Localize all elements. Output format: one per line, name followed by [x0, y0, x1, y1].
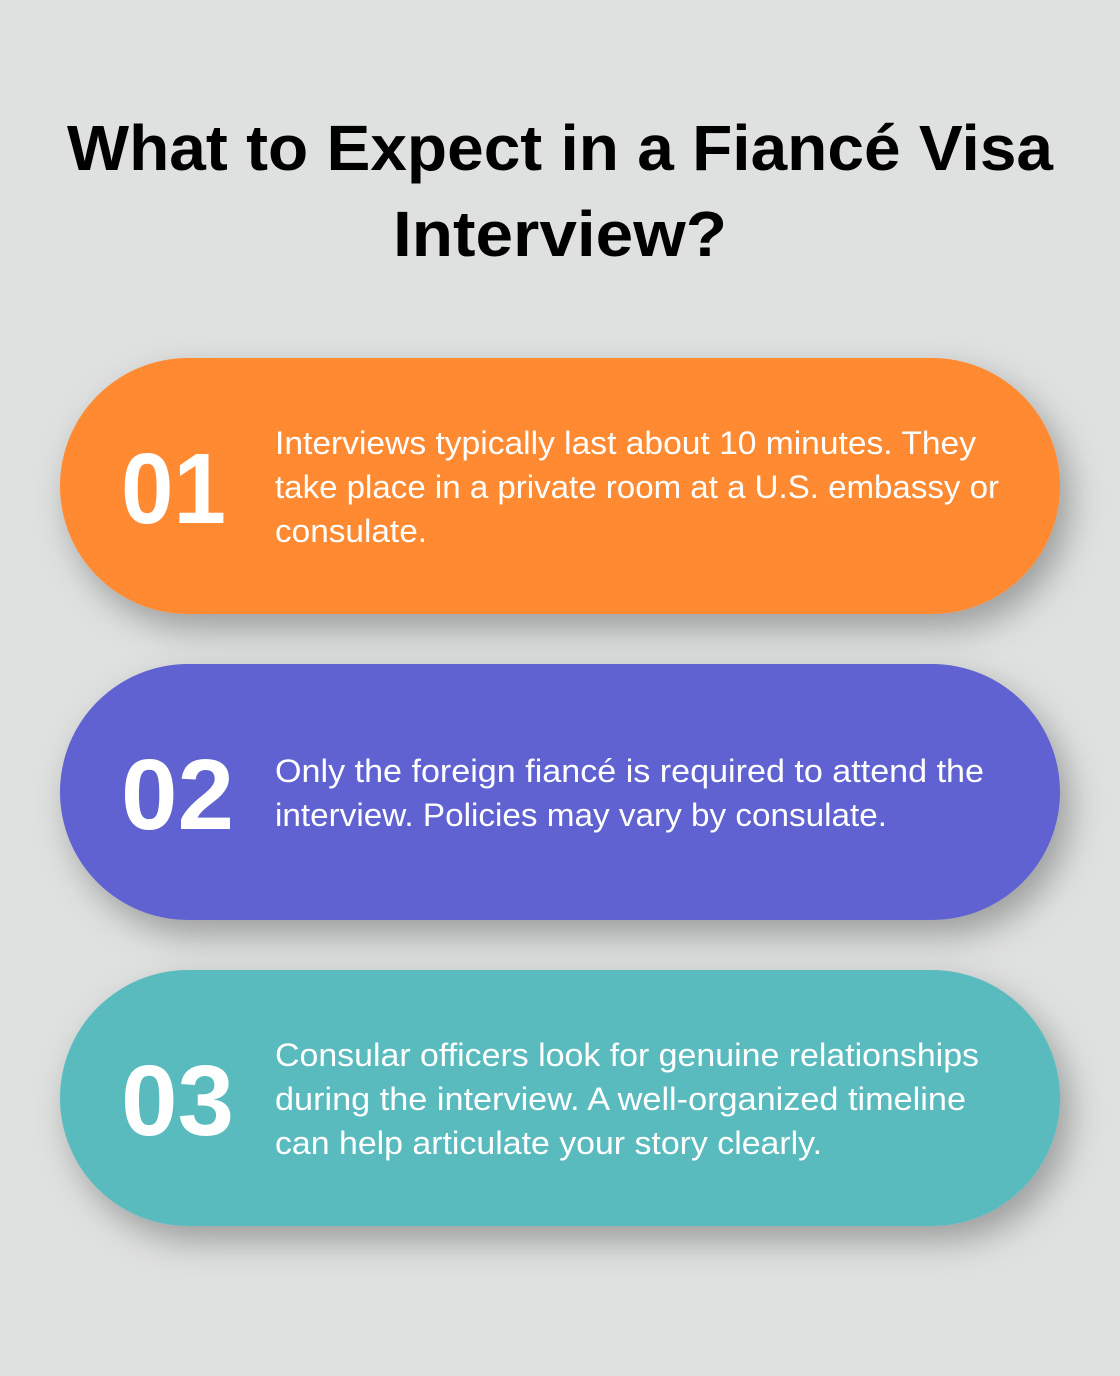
panel: step 03 [60, 970, 1060, 1226]
title [67, 112, 1053, 270]
panel: step 01 [60, 358, 1060, 614]
text: interview length and location: Interviews typically last about 10 minutes. They [275, 425, 977, 461]
number 03: 03 [121, 1045, 234, 1157]
title: Interview? [393, 198, 727, 270]
orange pill [60, 358, 1060, 614]
text: what officers look for: during the interview. A well-organized timeline [275, 1081, 966, 1117]
number 02: 02 [121, 739, 234, 851]
panel: step 02 [60, 664, 1060, 920]
text: who attends [275, 753, 984, 833]
teal pill [60, 970, 1060, 1226]
text: interview length and location [275, 425, 999, 549]
text: who attends: Only the foreign fiancé is required to attend the [275, 753, 984, 789]
text: interview length and location: consulate. [275, 513, 427, 549]
number 01: 01 [121, 433, 226, 545]
text: interview length and location: take place in a private room at a U.S. embassy or [275, 469, 999, 505]
text: who attends: interview. Policies may vary by consulate. [275, 797, 887, 833]
purple pill [60, 664, 1060, 920]
text: what officers look for: can help articulate your story clearly. [275, 1125, 822, 1161]
title: What to Expect in a Fiancé Visa [67, 112, 1053, 184]
text: what officers look for: Consular officers look for genuine relationships [275, 1037, 979, 1073]
text: what officers look for [275, 1037, 979, 1161]
